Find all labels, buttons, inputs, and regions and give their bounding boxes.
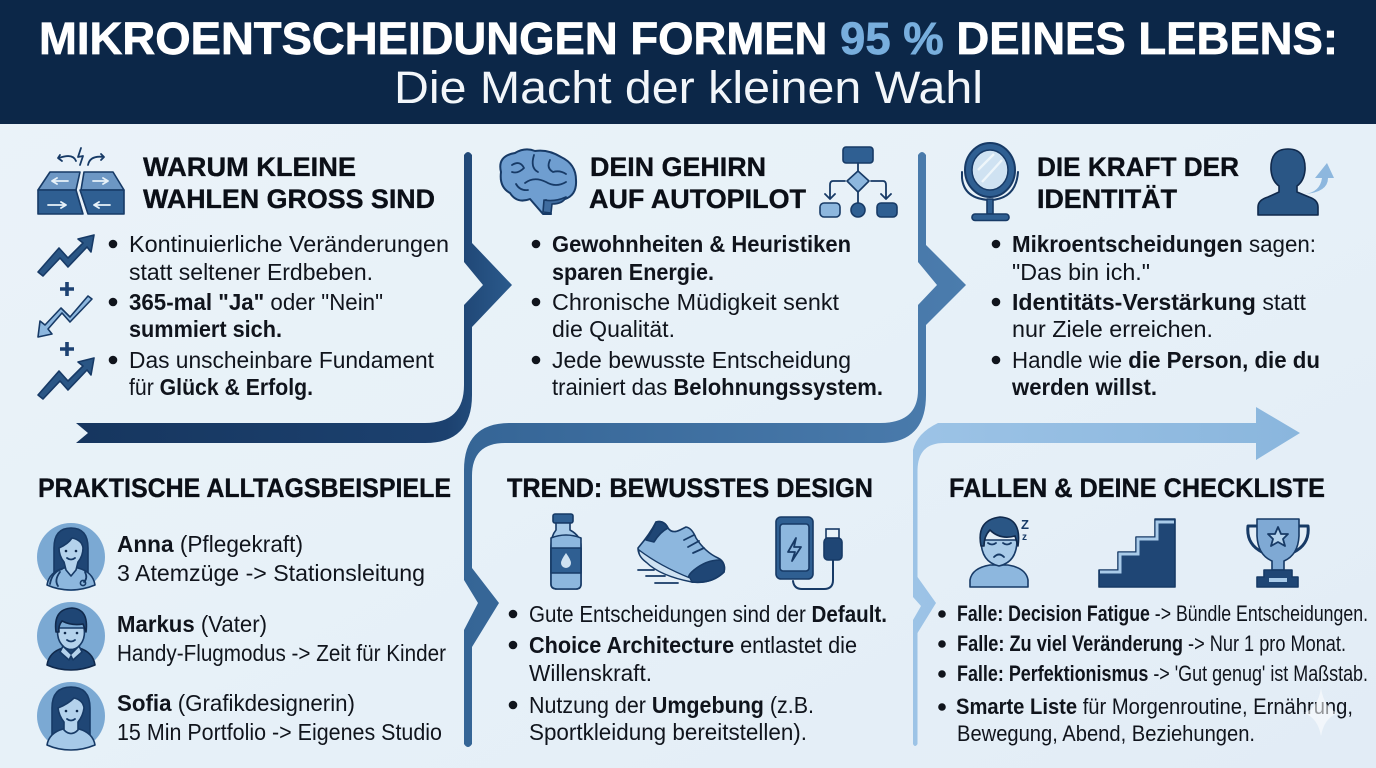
text: Sofia: 15 Min Portfolio -> Eigenes Studio [117, 719, 442, 745]
heading: PRAKTISCHE ALLTAGSBEISPIELE [38, 473, 451, 503]
icon: decision flowchart [820, 147, 897, 217]
heading [589, 152, 806, 214]
bullet list [509, 601, 887, 745]
heading: WAHLEN GROSS SIND [143, 184, 435, 214]
bullet list: Choice Architecture entlastet die [529, 632, 857, 658]
icon: person silhouette with arrow [1258, 149, 1334, 215]
text: Sofia: Sofia (Grafikdesignerin) [117, 690, 355, 716]
bullet list: 365-mal "Ja" oder "Nein" [129, 289, 383, 315]
text: Anna: Anna (Pflegekraft) [117, 531, 303, 557]
panel: kraft der identitaet [962, 143, 1334, 400]
bullet list: "Das bin ich." [1012, 259, 1150, 285]
text: Anna: 3 Atemzüge -> Stationsleitung [117, 560, 425, 586]
icon: tired person: z [1022, 532, 1027, 543]
panel: trend bewusstes design [507, 473, 887, 745]
bullet list: Jede bewusste Entscheidung [552, 347, 851, 373]
bullet list: Mikroentscheidungen sagen: [1012, 231, 1316, 257]
icon: tired person: Z [1021, 517, 1029, 532]
bullet list: Handle wie die Person, die du [1012, 347, 1320, 373]
text: Markus: Markus (Vater) [117, 611, 267, 637]
icon: tired person [970, 517, 1029, 587]
bullet list: Chronische Müdigkeit senkt [552, 289, 840, 315]
bullet list [992, 231, 1320, 400]
bullet list: Smarte Liste für Morgenroutine, Ernährung, [956, 694, 1353, 719]
text: Sofia [117, 690, 442, 745]
heading [1037, 152, 1239, 214]
text: Anna [117, 531, 425, 586]
icon: running shoe [638, 522, 724, 583]
text: Markus: Handy-Flugmodus -> Zeit für Kinder [117, 640, 446, 666]
text: Markus [117, 611, 446, 666]
avatar: Anna [37, 523, 105, 591]
bullet list: nur Ziele erreichen. [1012, 316, 1213, 342]
icon: trophy [1248, 519, 1308, 587]
panel: praktische alltagsbeispiele [37, 473, 451, 750]
header banner [0, 0, 1376, 124]
bullet list: Falle: Zu viel Veränderung -> Nur 1 pro Monat. [957, 631, 1346, 656]
avatar: Markus [37, 602, 105, 670]
flow ribbon: mid blue [464, 152, 966, 747]
bullet list: werden willst. [1011, 374, 1157, 400]
heading: AUF AUTOPILOT [589, 184, 806, 214]
bullet list: die Qualität. [552, 316, 675, 342]
heading: DIE KRAFT DER [1037, 152, 1239, 182]
bullet list: summiert sich. [129, 316, 282, 342]
bullet list: Sportkleidung bereitstellen). [529, 719, 807, 745]
icon: sparkle [1304, 688, 1338, 736]
heading: FALLEN & DEINE CHECKLISTE [949, 473, 1325, 503]
bullet list: für Glück & Erfolg. [129, 374, 313, 400]
heading [143, 152, 435, 214]
flow ribbon: light arrow [913, 407, 1300, 746]
heading: TREND: BEWUSSTES DESIGN [507, 473, 873, 503]
bullet list: Kontinuierliche Veränderungen [129, 231, 449, 257]
bullet list: Willenskraft. [529, 660, 652, 686]
flow ribbon: dark [76, 152, 512, 443]
bullet list: sparen Energie. [552, 259, 714, 285]
bullet list [938, 601, 1368, 746]
avatar: Sofia [37, 682, 105, 750]
bullet list: trainiert das Belohnungssystem. [552, 374, 883, 400]
icon: water bottle [551, 514, 581, 589]
panel: gehirn autopilot [500, 147, 897, 400]
panel: warum kleine wahlen [38, 148, 449, 400]
bullet list: Nutzung der Umgebung (z.B. [529, 692, 814, 718]
bullet list: Identitäts-Verstärkung statt [1012, 289, 1307, 315]
icon: phone with charger [776, 517, 842, 589]
bullet list: Gute Entscheidungen sind der Default. [529, 601, 887, 627]
heading: DEIN GEHIRN [590, 152, 766, 182]
icon: tectonic plates [38, 148, 124, 214]
icon: zigzag arrows with plus [38, 235, 94, 399]
heading: WARUM KLEINE [143, 152, 356, 182]
icon: brain [500, 149, 576, 214]
title line 1: MIKROENTSCHEIDUNGEN FORMEN 95 % DEINES LEBENS: [39, 13, 1338, 64]
bullet list: statt seltener Erdbeben. [129, 259, 373, 285]
panel: fallen und checkliste [938, 473, 1368, 746]
bullet list [532, 231, 883, 400]
heading: IDENTITÄT [1037, 184, 1177, 214]
bullet list: Bewegung, Abend, Beziehungen. [957, 721, 1255, 746]
icon: staircase [1099, 519, 1175, 587]
bullet list [109, 231, 449, 400]
title line 2: Die Macht der kleinen Wahl [394, 62, 983, 113]
bullet list: Gewohnheiten & Heuristiken [552, 231, 851, 257]
icon: mirror [962, 143, 1018, 220]
bullet list: Das unscheinbare Fundament [129, 347, 435, 373]
